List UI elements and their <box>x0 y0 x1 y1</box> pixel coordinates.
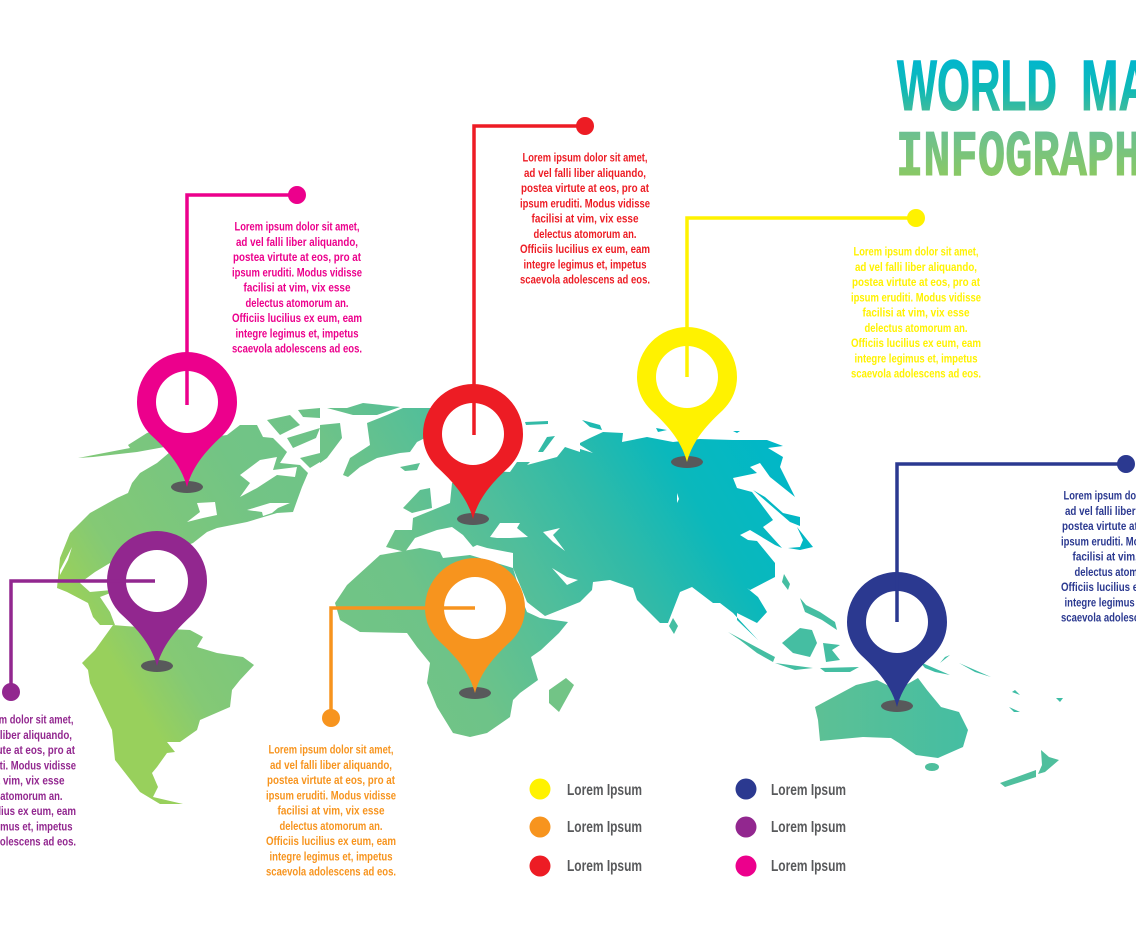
pin: purple <box>107 531 207 672</box>
text block: yellow: facilisi at vim, vix esse <box>862 306 970 320</box>
text block: orange: facilisi at vim, vix esse <box>278 804 385 818</box>
northern islands <box>400 420 813 550</box>
text block: pink: Lorem ipsum dolor sit amet, <box>234 220 360 234</box>
title <box>896 47 1136 195</box>
text block: navy <box>1061 488 1136 624</box>
south america <box>82 625 254 804</box>
legend: Lorem Ipsum <box>567 858 642 875</box>
text block: red: ad vel falli liber aliquando, <box>524 166 646 180</box>
madagascar <box>549 678 574 712</box>
text block: orange: postea virtute at eos, pro at <box>267 773 395 787</box>
pin: navy <box>847 572 947 712</box>
text block: orange: delectus atomorum an. <box>280 819 382 833</box>
legend: Lorem Ipsum <box>771 858 846 875</box>
leader: pink <box>187 186 306 405</box>
text block: orange: scaevola adolescens ad eos. <box>266 864 396 878</box>
leader: purple <box>2 581 155 701</box>
text block: pink: facilisi at vim, vix esse <box>244 280 351 294</box>
text block: purple <box>0 712 76 848</box>
text block: yellow: ipsum eruditi. Modus vidisse <box>851 290 981 304</box>
text block: yellow: Lorem ipsum dolor sit amet, <box>854 244 978 258</box>
arctic islands <box>267 403 400 468</box>
text block: pink: delectus atomorum an. <box>246 296 348 310</box>
text block: red: integre legimus et, impetus <box>524 257 647 271</box>
text block: red: facilisi at vim, vix esse <box>532 212 639 226</box>
text block: pink: integre legimus et, impetus <box>236 326 359 340</box>
legend: Lorem Ipsum <box>567 819 642 836</box>
text block: yellow: delectus atomorum an. <box>864 321 968 335</box>
pin: pink <box>137 352 237 493</box>
africa <box>335 548 568 737</box>
legend: Lorem Ipsum <box>567 782 642 799</box>
text block: yellow: ad vel falli liber aliquando, <box>855 260 977 274</box>
text block: red: Lorem ipsum dolor sit amet, <box>522 150 648 164</box>
legend: Lorem Ipsum <box>771 819 846 836</box>
new zealand <box>1000 750 1059 787</box>
text block: yellow: scaevola adolescens ad eos. <box>851 366 981 380</box>
text block: pink: Officiis lucilius ex eum, eam <box>232 311 362 325</box>
eurasia <box>386 432 795 640</box>
text block: red: postea virtute at eos, pro at <box>521 181 649 195</box>
text block: pink: ipsum eruditi. Modus vidisse <box>232 265 362 279</box>
text block: yellow: postea virtute at eos, pro at <box>852 275 980 289</box>
pin: red <box>423 384 523 525</box>
text block: pink: ad vel falli liber aliquando, <box>236 235 358 249</box>
text block: orange: Lorem ipsum dolor sit amet, <box>268 742 394 756</box>
tasmania <box>925 763 939 771</box>
leader: red <box>474 117 594 435</box>
legend <box>530 778 846 876</box>
text block: red: Officiis lucilius ex eum, eam <box>520 242 650 256</box>
text block: yellow: integre legimus et, impetus <box>854 351 978 365</box>
alaska sliver <box>78 425 195 458</box>
text block: red: delectus atomorum an. <box>534 227 636 241</box>
text block: red: ipsum eruditi. Modus vidisse <box>520 196 650 210</box>
text block: yellow <box>851 244 981 380</box>
text block: pink: scaevola adolescens ad eos. <box>232 342 362 356</box>
seas and lakes <box>60 445 679 592</box>
southeast asia islands <box>669 574 859 672</box>
text block: orange: integre legimus et, impetus <box>270 849 393 863</box>
legend: Lorem Ipsum <box>771 782 846 799</box>
text block: pink <box>232 220 362 356</box>
pin: orange <box>425 558 525 699</box>
leader: yellow <box>687 209 925 377</box>
world map <box>57 403 1063 804</box>
australia <box>815 678 968 758</box>
leader: navy <box>897 455 1135 622</box>
text block: orange: Officiis lucilius ex eum, eam <box>266 834 396 848</box>
leader: orange <box>322 608 475 727</box>
text block: yellow: Officiis lucilius ex eum, eam <box>851 336 981 350</box>
text block: orange: ad vel falli liber aliquando, <box>270 758 392 772</box>
text block: red: scaevola adolescens ad eos. <box>520 272 650 286</box>
pin: yellow <box>637 327 737 468</box>
text block: pink: postea virtute at eos, pro at <box>233 250 361 264</box>
text block: orange <box>266 742 396 878</box>
new guinea and pacific islands <box>920 655 1063 712</box>
text block: orange: ipsum eruditi. Modus vidisse <box>266 788 396 802</box>
greenland <box>343 408 440 477</box>
north america <box>57 425 308 625</box>
text block: red <box>520 150 650 286</box>
